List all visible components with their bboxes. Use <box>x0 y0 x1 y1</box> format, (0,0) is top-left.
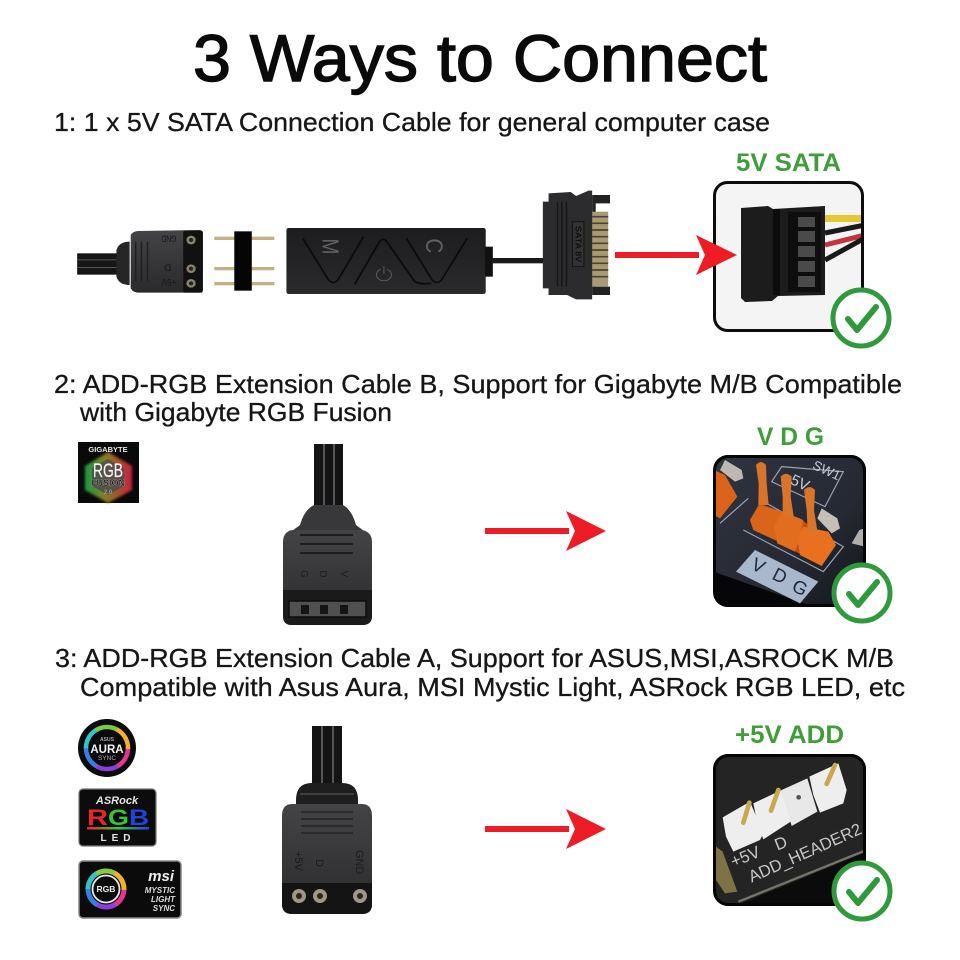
photo: V D G motherboard header <box>713 455 867 608</box>
photo: V D G motherboard header: D <box>769 563 791 588</box>
cable A connector: D <box>313 859 325 867</box>
logo: Asus Aura Sync <box>78 719 136 777</box>
logo: Gigabyte RGB Fusion: 2.0 <box>104 490 113 496</box>
RGB plug cable and connector: D <box>164 261 171 272</box>
logo: Asus Aura Sync: AURA <box>90 744 124 756</box>
photo: SATA power socket <box>713 181 865 332</box>
cable A connector: +5V <box>292 851 304 872</box>
photo: V D G motherboard header: V <box>748 553 769 578</box>
arrow: to +5V ADD <box>485 809 606 849</box>
controller box: C <box>421 238 448 253</box>
photo: +5V ADD motherboard header: ADD_HEADER2 <box>746 819 864 886</box>
heading: way 2: 2: ADD-RGB Extension Cable B, Support for Gigabyte M/B Compatible <box>54 369 902 399</box>
logo: MSI Mystic Light Sync: LIGHT <box>151 895 176 904</box>
heading: way 3 <box>55 643 905 702</box>
logo: Asus Aura Sync: ASUS <box>100 737 115 743</box>
arrow: to 5V SATA <box>615 235 737 275</box>
logo: ASRock RGB LED <box>79 789 156 846</box>
SATA plug <box>543 191 610 299</box>
cable: controller with SATA connector assembly <box>77 191 610 299</box>
logo: Asus Aura Sync: SYNC <box>98 755 116 762</box>
check badge 3 <box>834 863 890 919</box>
heading: way 3: 3: ADD-RGB Extension Cable A, Support for ASUS,MSI,ASROCK M/B <box>55 643 894 673</box>
cable A connector <box>282 726 372 914</box>
label: 5V SATA: 5V SATA <box>736 149 841 177</box>
photo: +5V ADD motherboard header: +5V <box>728 842 764 871</box>
arrow: to V D G <box>485 511 606 551</box>
RGB plug cable and connector: +5V <box>161 276 176 287</box>
photo: V D G motherboard header: SW1 <box>810 457 843 483</box>
controller box: M <box>317 238 342 254</box>
check badge 1 <box>833 290 889 346</box>
heading: way 3: Compatible with Asus Aura, MSI Mystic Light, ASRock RGB LED, etc <box>80 672 905 702</box>
pin header adapter <box>214 231 274 291</box>
label: +5V ADD: +5V ADD <box>735 721 844 749</box>
logo: Gigabyte RGB Fusion <box>78 442 139 503</box>
logo: ASRock RGB LED: R <box>87 805 108 830</box>
logo: ASRock RGB LED: B <box>129 805 149 830</box>
heading: way 2 <box>54 369 902 427</box>
photo: +5V ADD motherboard header <box>713 753 867 907</box>
logo: Gigabyte RGB Fusion: GIGABYTE <box>88 445 128 454</box>
label: V D G: V D G <box>757 423 824 451</box>
cable A connector: GND <box>353 850 365 874</box>
logo: ASRock RGB LED: G <box>108 805 129 830</box>
cable B connector: D <box>317 570 328 578</box>
SATA plug: SATA 8V <box>573 226 583 262</box>
logo: Gigabyte RGB Fusion: RGB <box>93 461 123 482</box>
logo: ASRock RGB LED: LED <box>100 833 136 844</box>
photo: V D G motherboard header: G <box>789 575 811 600</box>
logo: MSI Mystic Light Sync: msi <box>148 868 175 885</box>
cable B connector: V <box>338 571 349 578</box>
logo: MSI Mystic Light Sync <box>79 861 181 918</box>
cable B connector: G <box>298 570 309 578</box>
photo: V D G motherboard header: 5V <box>788 472 813 495</box>
heading: way 2: with Gigabyte RGB Fusion <box>79 397 392 427</box>
logo: Gigabyte RGB Fusion: FUSION <box>91 478 125 488</box>
logo: MSI Mystic Light Sync: MYSTIC <box>145 886 175 895</box>
photo: +5V ADD motherboard header: D <box>772 832 790 854</box>
logo: MSI Mystic Light Sync: SYNC <box>153 904 175 913</box>
controller box <box>286 228 547 294</box>
logo: MSI Mystic Light Sync: RGB <box>97 884 115 894</box>
RGB plug cable and connector <box>77 230 203 293</box>
logo: ASRock RGB LED: ASRock <box>95 795 139 807</box>
title: 3 Ways to Connect <box>193 21 767 95</box>
RGB plug cable and connector: GND <box>161 233 176 243</box>
heading: way 1: 1: 1 x 5V SATA Connection Cable for general computer case <box>54 107 770 137</box>
cable B connector <box>283 444 372 625</box>
check badge 2 <box>834 565 890 621</box>
